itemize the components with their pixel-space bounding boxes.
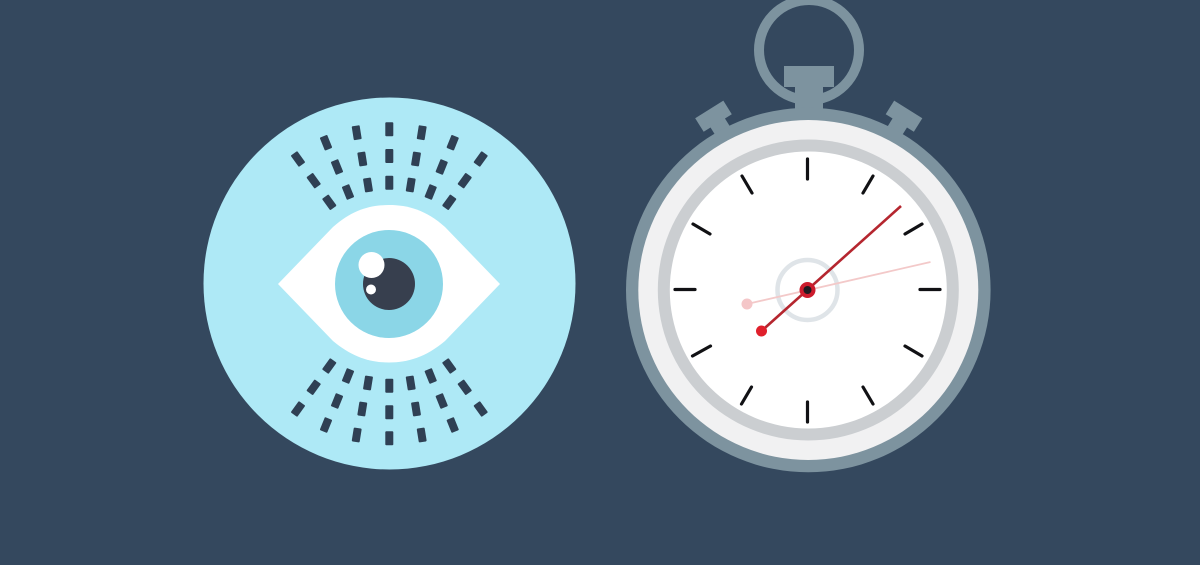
hour ticks [675, 159, 940, 422]
top ring [759, 0, 859, 100]
centre hub [800, 282, 816, 298]
crown [784, 66, 834, 118]
icon: stopwatch [626, 0, 991, 472]
clock face [670, 152, 947, 428]
bottom eyelash dashes [291, 358, 488, 445]
eye white [278, 205, 500, 362]
centre ring [778, 260, 838, 320]
bezel [638, 120, 978, 460]
pupil [363, 258, 415, 310]
small highlight [366, 284, 376, 294]
icon: eye badge [204, 98, 576, 470]
right side button [878, 101, 922, 145]
light blue circle [204, 98, 576, 470]
inner grey ring [658, 140, 959, 440]
large highlight [358, 252, 384, 278]
pale second hand [742, 262, 930, 310]
left side button [695, 101, 740, 145]
outer case [626, 108, 991, 472]
iris [335, 230, 443, 338]
top eyelash dashes [291, 122, 488, 210]
red hand [756, 206, 901, 336]
